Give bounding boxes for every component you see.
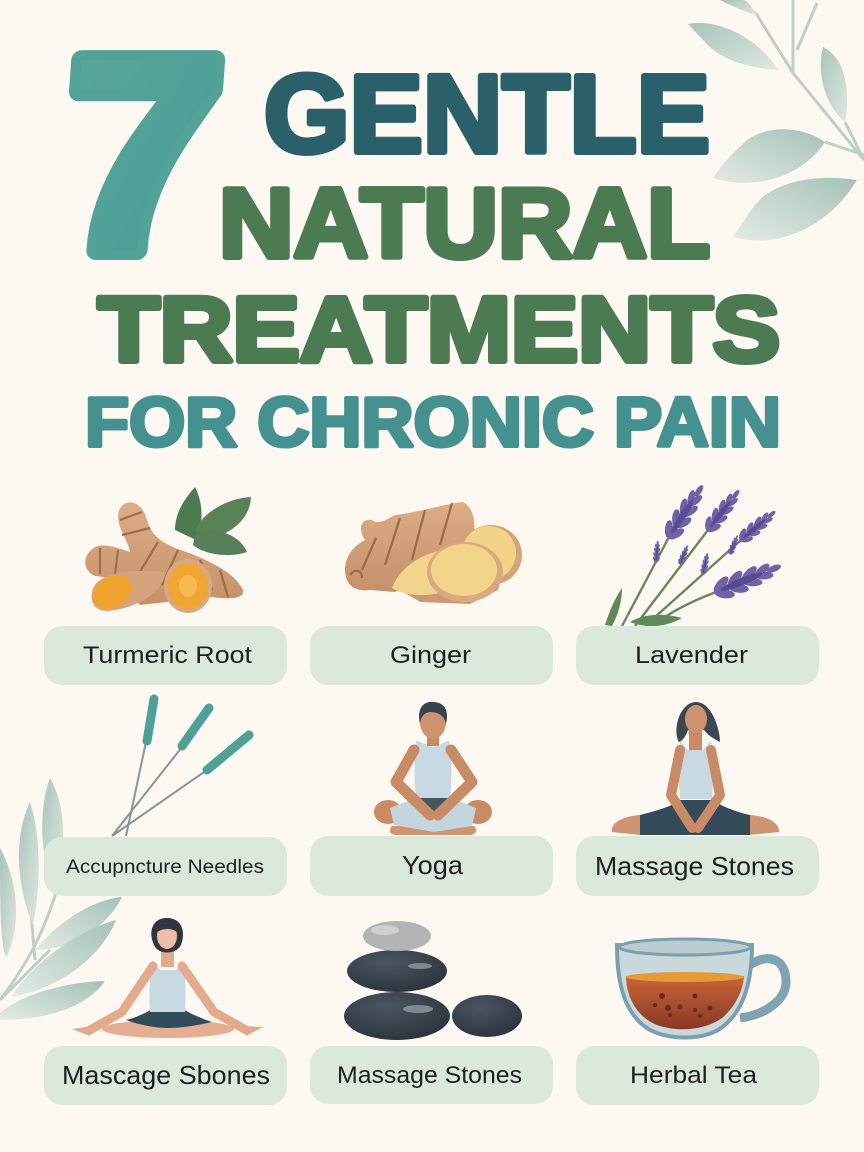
title line: gentle: GENTLE <box>264 53 710 176</box>
icon: yoga figure <box>374 702 492 835</box>
icon: ginger <box>345 502 522 604</box>
label pill: lavender: Lavender <box>635 642 748 669</box>
label pill: acupuncture needles <box>44 837 287 896</box>
label pill: acupuncture needles: Accupncture Needles <box>66 857 264 878</box>
label pill: herbal tea <box>576 1046 819 1105</box>
icon: acupuncture needles <box>112 699 249 836</box>
label pill: mascage sbones: Mascage Sbones <box>62 1060 270 1090</box>
label pill: lavender <box>576 626 819 685</box>
label pill: turmeric root <box>44 626 287 685</box>
label pill: massage stones <box>576 836 819 896</box>
label pill: mascage sbones <box>44 1046 287 1105</box>
label pill: yoga <box>310 836 553 896</box>
label pill: ginger: Ginger <box>390 642 471 669</box>
label pill: ginger <box>310 626 553 685</box>
icon: turmeric root <box>85 487 251 616</box>
icon: massage stones <box>344 921 522 1040</box>
decorative leaves: top right <box>688 0 864 240</box>
icon: meditating figure <box>72 918 263 1038</box>
title <box>52 0 781 461</box>
label pill: massage stones: Massage Stones <box>595 851 794 881</box>
label pill: massage stones second <box>310 1046 553 1104</box>
title line: natural: NATURAL <box>219 168 710 278</box>
title line: treatments: TREATMENTS <box>98 279 780 381</box>
icon: herbal tea cup <box>617 939 786 1038</box>
icon: seated figure with dark shorts <box>612 702 779 835</box>
label pill: massage stones second: Massage Stones <box>337 1062 522 1089</box>
label pill: yoga: Yoga <box>402 850 464 880</box>
title line: for chronic pain: FOR CHRONIC PAIN <box>85 383 781 461</box>
decorative leaves: bottom left <box>0 778 122 1020</box>
icon: lavender <box>605 479 786 626</box>
label pill: herbal tea: Herbal Tea <box>630 1062 758 1089</box>
label pill: turmeric root: Turmeric Root <box>83 642 252 669</box>
title numeral 7: 7 <box>52 0 231 309</box>
